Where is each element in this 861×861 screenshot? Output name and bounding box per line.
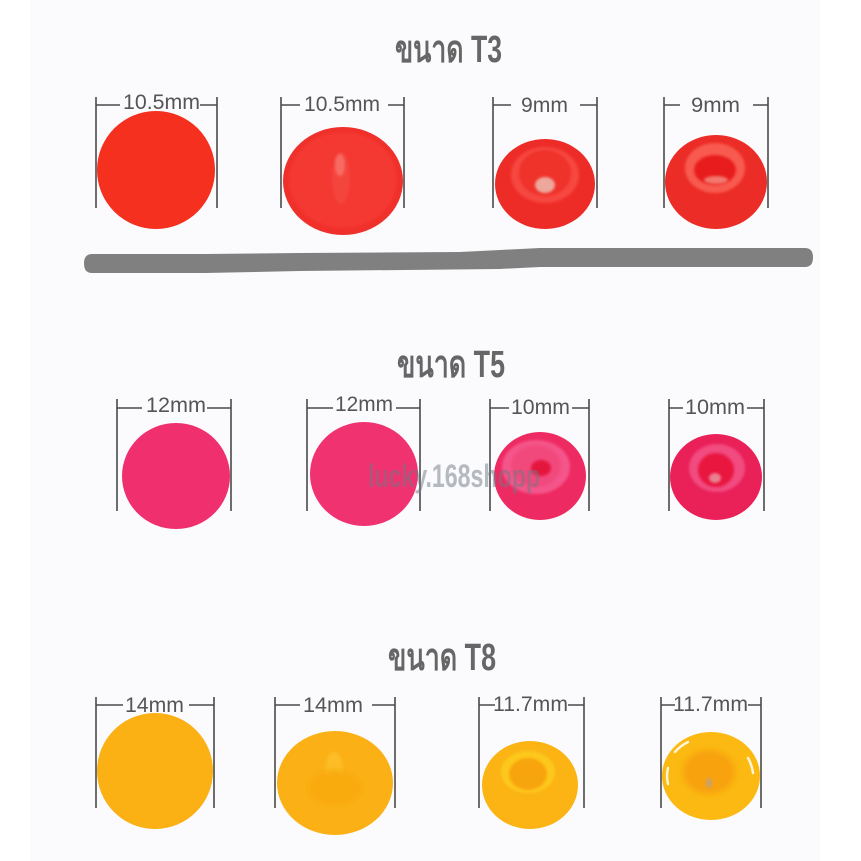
- dimension: 10mm stud: 10mm: [685, 396, 745, 419]
- snap: red stud: [665, 135, 767, 229]
- dimension: 12mm cap back: [307, 393, 420, 511]
- dimension: 14mm cap top: 14mm: [125, 694, 184, 717]
- dimension: 14mm cap back: [275, 694, 395, 808]
- dimension: 9mm socket: 9mm: [521, 94, 568, 117]
- heading: T3: ขนาด T3: [395, 29, 502, 71]
- dimension: 11.7mm socket: 11.7mm: [493, 693, 568, 716]
- dimension: 12mm cap top: [117, 394, 231, 511]
- dimension: 14mm cap back: 14mm: [303, 694, 363, 717]
- dimension: 14mm cap top: [96, 694, 214, 808]
- panel: size T8: [96, 637, 761, 835]
- snap: red cap top: [97, 111, 215, 229]
- dimension: 11.7mm stud: [661, 693, 761, 808]
- snap: pink stud: [670, 434, 762, 520]
- snap: pink socket: [494, 432, 586, 520]
- dimension: 11.7mm stud: 11.7mm: [673, 693, 748, 716]
- snap: pink cap top: [122, 423, 230, 529]
- watermark: lucky.168shopp: [368, 458, 540, 494]
- dimension: 10mm socket: [490, 396, 589, 511]
- snap: yellow cap top: [97, 713, 213, 829]
- dimension: 11.7mm socket: [479, 693, 584, 808]
- snap: yellow cap back: [277, 731, 393, 835]
- snap: red cap back with post: [283, 127, 403, 235]
- snap: yellow socket: [482, 741, 578, 829]
- heading: T5: ขนาด T5: [397, 344, 505, 386]
- panel: size T5: [117, 344, 764, 529]
- dimension: 10mm socket: 10mm: [511, 396, 570, 419]
- snap: red socket: [495, 139, 595, 229]
- dimension: 9mm socket: [493, 94, 597, 208]
- snap: pink cap back: [310, 422, 418, 526]
- dimension: 10mm stud: [669, 396, 764, 511]
- snap: yellow stud: [662, 732, 760, 820]
- dimension: 12mm cap top: 12mm: [146, 394, 206, 417]
- dimension: 10.5mm cap back: [281, 93, 404, 208]
- dimension: 10.5mm cap top: [96, 91, 217, 208]
- divider: grey marker stroke: [84, 248, 813, 273]
- dimension: 12mm cap back: 12mm: [335, 393, 393, 416]
- panel: size T3: [96, 29, 768, 235]
- dimension: 9mm stud: 9mm: [691, 94, 740, 117]
- dimension: 9mm stud: [664, 94, 768, 208]
- dimension: 10.5mm cap top: 10.5mm: [123, 91, 200, 114]
- heading: T8: ขนาด T8: [388, 637, 496, 679]
- dimension: 10.5mm cap back: 10.5mm: [304, 93, 380, 116]
